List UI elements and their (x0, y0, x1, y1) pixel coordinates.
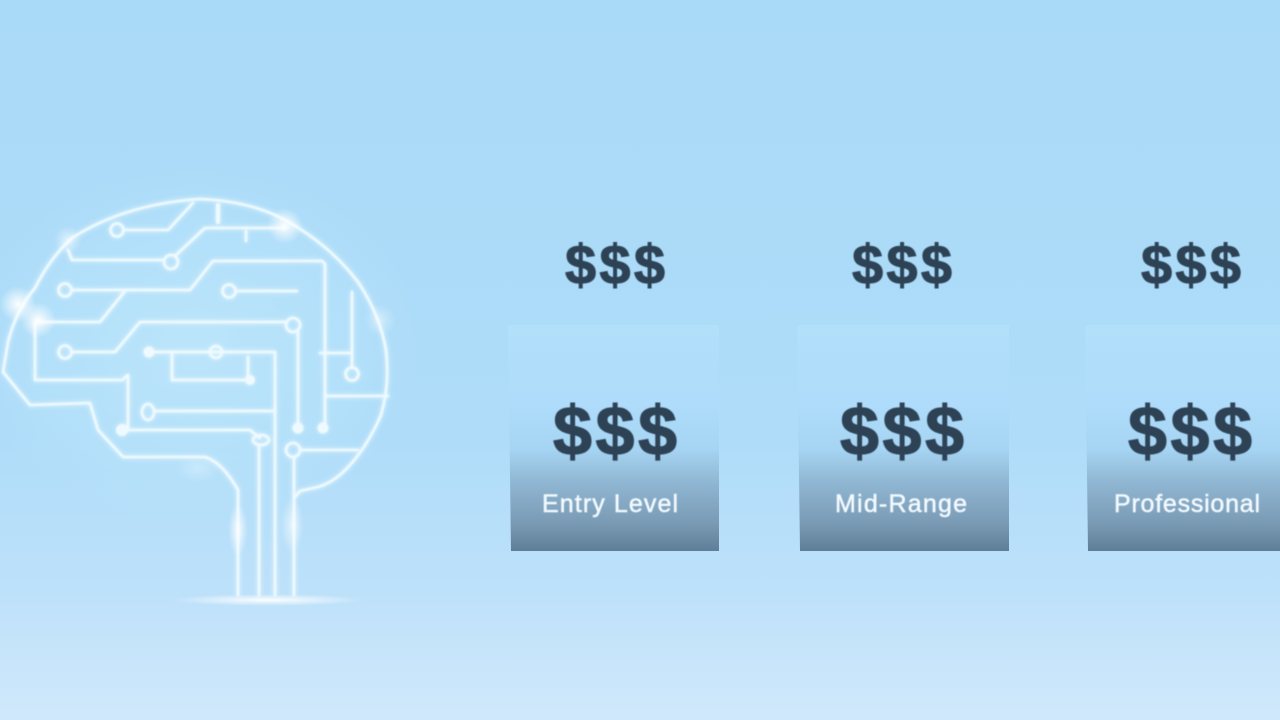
price symbols: professional: $$$ (1141, 233, 1241, 296)
brain halo (0, 165, 420, 525)
panel: professional column (1085, 233, 1280, 551)
brain base glow (173, 594, 363, 606)
tier label: entry level: Entry Level (542, 490, 678, 518)
card price: mid-range: $$$ (840, 392, 964, 470)
card: entry level (508, 325, 719, 551)
tier label: mid-range: Mid-Range (835, 490, 967, 518)
card: professional (1085, 325, 1280, 551)
card price: professional: $$$ (1128, 392, 1252, 470)
price symbols: entry level: $$$ (565, 233, 665, 296)
glow sparks (0, 208, 396, 556)
card: mid-range (797, 325, 1009, 551)
price symbols: mid-range: $$$ (852, 233, 952, 296)
icon: circuit brain (0, 165, 420, 606)
panel: mid-range column (797, 233, 1009, 551)
card price: entry level: $$$ (553, 392, 677, 470)
tier label: professional: Professional (1114, 490, 1260, 518)
panel: entry level column (508, 233, 719, 551)
brain circuit lines (3, 199, 388, 595)
